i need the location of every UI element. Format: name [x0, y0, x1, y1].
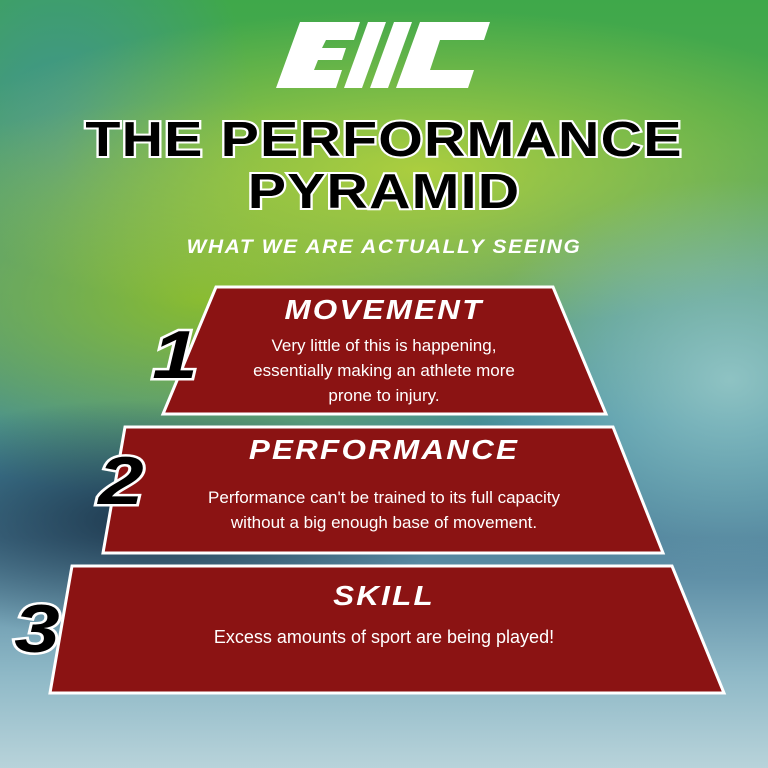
number 3: 3 — [14, 591, 60, 667]
tier 3 text: Excess amounts of sport are being played! — [214, 627, 554, 647]
tier 2 shape — [103, 427, 663, 553]
subtitle: WHAT WE ARE ACTUALLY SEEING — [187, 237, 581, 258]
logo — [276, 22, 490, 88]
tier 1 text: essentially making an athlete more — [253, 361, 515, 380]
number 1: 1 — [152, 317, 198, 393]
tier 3 heading: SKILL — [333, 580, 435, 611]
tier 2 text: Performance can't be trained to its full capacity — [208, 488, 560, 507]
tier 1 shape — [163, 287, 606, 414]
tier 2 heading: PERFORMANCE — [249, 434, 519, 465]
tier 1 text: Very little of this is happening, — [272, 336, 496, 355]
tier 3 shape — [50, 566, 724, 693]
tier 1 text — [253, 336, 515, 405]
number 2: 2 — [98, 443, 144, 519]
title — [84, 113, 683, 219]
title: THE PERFORMANCE — [85, 113, 683, 167]
tier 1 text: prone to injury. — [328, 386, 440, 405]
tier 1 heading: MOVEMENT — [284, 294, 484, 325]
tier 2 text: without a big enough base of movement. — [231, 513, 537, 532]
tier 2 text — [208, 488, 560, 532]
title: PYRAMID — [248, 165, 520, 219]
